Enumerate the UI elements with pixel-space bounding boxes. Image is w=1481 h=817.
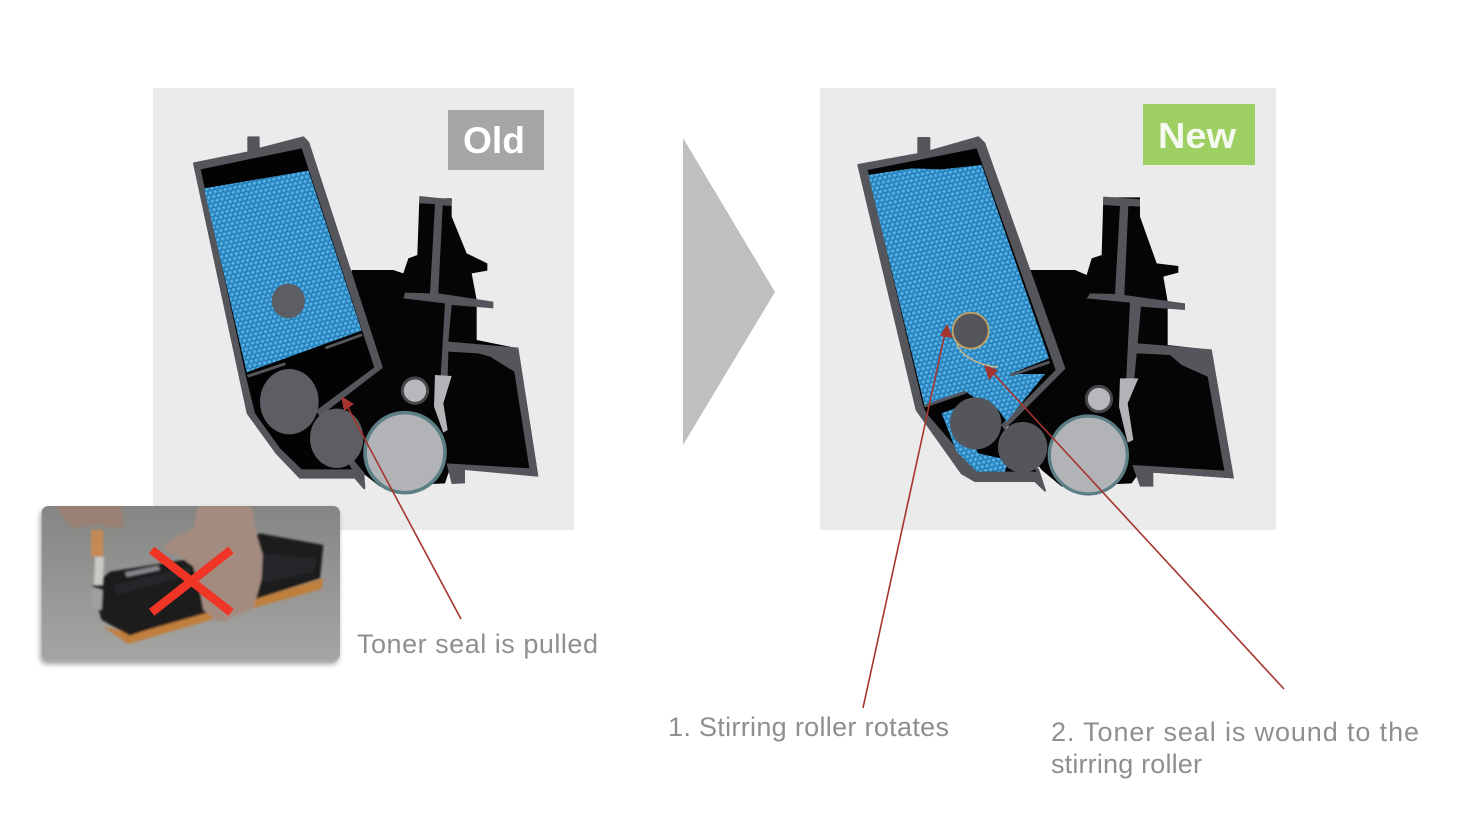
old hopper shell — [194, 137, 382, 488]
new label tag — [1143, 104, 1255, 165]
old drum — [365, 413, 445, 493]
new cartridge cross-section — [858, 137, 1234, 494]
toner cartridge base — [103, 578, 323, 644]
caption: toner seal wound — [1051, 717, 1419, 779]
old feed rollers — [260, 369, 319, 434]
new small roller — [1086, 386, 1112, 412]
old label tag: Old — [463, 120, 525, 161]
new stirring roller with wound seal — [953, 313, 998, 367]
new hopper shell — [858, 137, 1064, 491]
toner cartridge body — [92, 533, 323, 636]
new label tag: New — [1158, 115, 1237, 156]
panel: new design — [820, 88, 1276, 530]
old right body — [320, 198, 538, 487]
arrow: old to new — [683, 138, 775, 445]
right hand — [165, 506, 263, 622]
new right body — [1005, 197, 1233, 487]
caption: stirring roller rotates: 1. Stirring roller rotates — [668, 712, 949, 742]
arrow: stirring roller — [863, 324, 953, 708]
new panel background — [820, 88, 1276, 530]
old toner particles — [204, 171, 362, 372]
red cross — [152, 550, 231, 612]
old panel background — [153, 88, 574, 530]
old small roller — [402, 378, 428, 403]
old cartridge cross-section — [194, 137, 538, 493]
arrow: toner seal pulled — [341, 396, 461, 619]
new toner particles — [868, 165, 1049, 422]
old stirring roller — [272, 284, 305, 318]
photo: pulling toner seal by hand, crossed out — [42, 506, 340, 661]
caption: toner seal wound: stirring roller — [1051, 749, 1202, 779]
caption: toner seal wound: 2. Toner seal is wound to the — [1051, 717, 1419, 747]
left hand — [55, 506, 123, 528]
new feed rollers — [950, 397, 1001, 449]
new drum — [1049, 416, 1127, 494]
old label tag — [448, 110, 544, 170]
arrow: toner seal wound — [984, 365, 1284, 689]
caption: toner seal is pulled: Toner seal is pulled — [357, 629, 598, 659]
seal strip — [94, 557, 104, 585]
panel: old design — [153, 88, 574, 530]
photo background — [42, 506, 340, 661]
